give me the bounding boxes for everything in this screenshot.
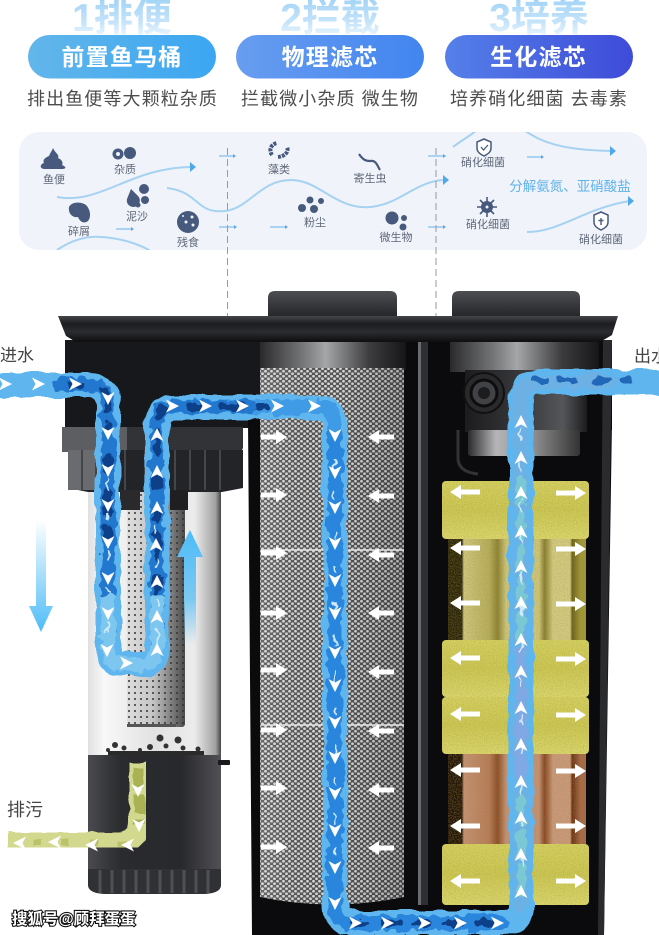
icon: fish waste (41, 148, 65, 169)
filter 2: mesh cartridge (260, 342, 406, 904)
icon: shield check (477, 139, 491, 156)
label: 残食: 残食 (177, 235, 199, 249)
label: 寄生虫: 寄生虫 (354, 171, 386, 185)
main black body (248, 420, 612, 935)
icon: dust (298, 196, 324, 213)
pill: 生化滤芯: 生化滤芯 (490, 44, 587, 70)
description: 拦截微小杂质 微生物: 拦截微小杂质 微生物 (241, 89, 419, 109)
icon: debris (69, 203, 90, 222)
icon: shield plus (594, 212, 608, 230)
label: 杂质: 杂质 (114, 163, 136, 176)
label: 硝化细菌 top: 硝化细菌 (461, 155, 505, 169)
label: 碎屑: 碎屑 (68, 224, 90, 238)
top handle left (268, 291, 397, 316)
label: 粉尘: 粉尘 (304, 216, 326, 229)
lid (58, 316, 618, 342)
label: 微生物: 微生物 (380, 230, 412, 244)
label: 鱼便: 鱼便 (43, 172, 65, 186)
water stream: blue flow through filters (0, 380, 659, 923)
device: aquarium filter housing (58, 291, 618, 935)
description: 排出鱼便等大颗粒杂质: 排出鱼便等大颗粒杂质 (27, 89, 218, 109)
arrows: flow through mesh (261, 430, 394, 855)
label: 进水: 进水 (0, 346, 34, 365)
icon: silt (127, 184, 149, 208)
label: 硝化细菌 middle: 硝化细菌 (466, 217, 510, 231)
arrow: large down arrow (29, 520, 53, 632)
label: 泥沙: 泥沙 (126, 210, 148, 223)
label: 分解氨氮、亚硝酸盐: 分解氨氮、亚硝酸盐 (509, 179, 631, 194)
chevrons: water direction (0, 378, 528, 930)
filter 1: prefilter cylinder (62, 427, 243, 894)
pill: 前置鱼马桶: 前置鱼马桶 (62, 44, 182, 70)
pill: 生化滤芯 (445, 35, 633, 78)
pill: 物理滤芯: 物理滤芯 (282, 44, 378, 70)
label: 藻类: 藻类 (268, 162, 290, 176)
filter 3: bio filter (442, 342, 599, 905)
upper left chamber (65, 340, 265, 428)
arrow: large up arrow (177, 530, 203, 645)
label: 硝化细菌 bottom: 硝化细菌 (579, 232, 623, 246)
icon: impurities (112, 147, 136, 160)
top handle right (452, 291, 580, 316)
icon: microbes (386, 212, 407, 230)
pill: 前置鱼马桶 (28, 35, 216, 78)
icon: parasite (359, 154, 380, 170)
icon: bacteria (477, 197, 497, 217)
arrows: flow through bio sponge (450, 485, 586, 888)
panel: impurities flow diagram (19, 130, 647, 252)
description: 培养硝化细菌 去毒素: 培养硝化细菌 去毒素 (450, 89, 628, 109)
pill: 物理滤芯 (236, 35, 424, 78)
icon: leftover food (177, 211, 199, 233)
label: 排污: 排污 (7, 800, 43, 820)
icon: algae (270, 143, 288, 157)
divider (418, 342, 428, 905)
watermark: 搜狐号@顾拜蛋蛋 (12, 909, 136, 928)
